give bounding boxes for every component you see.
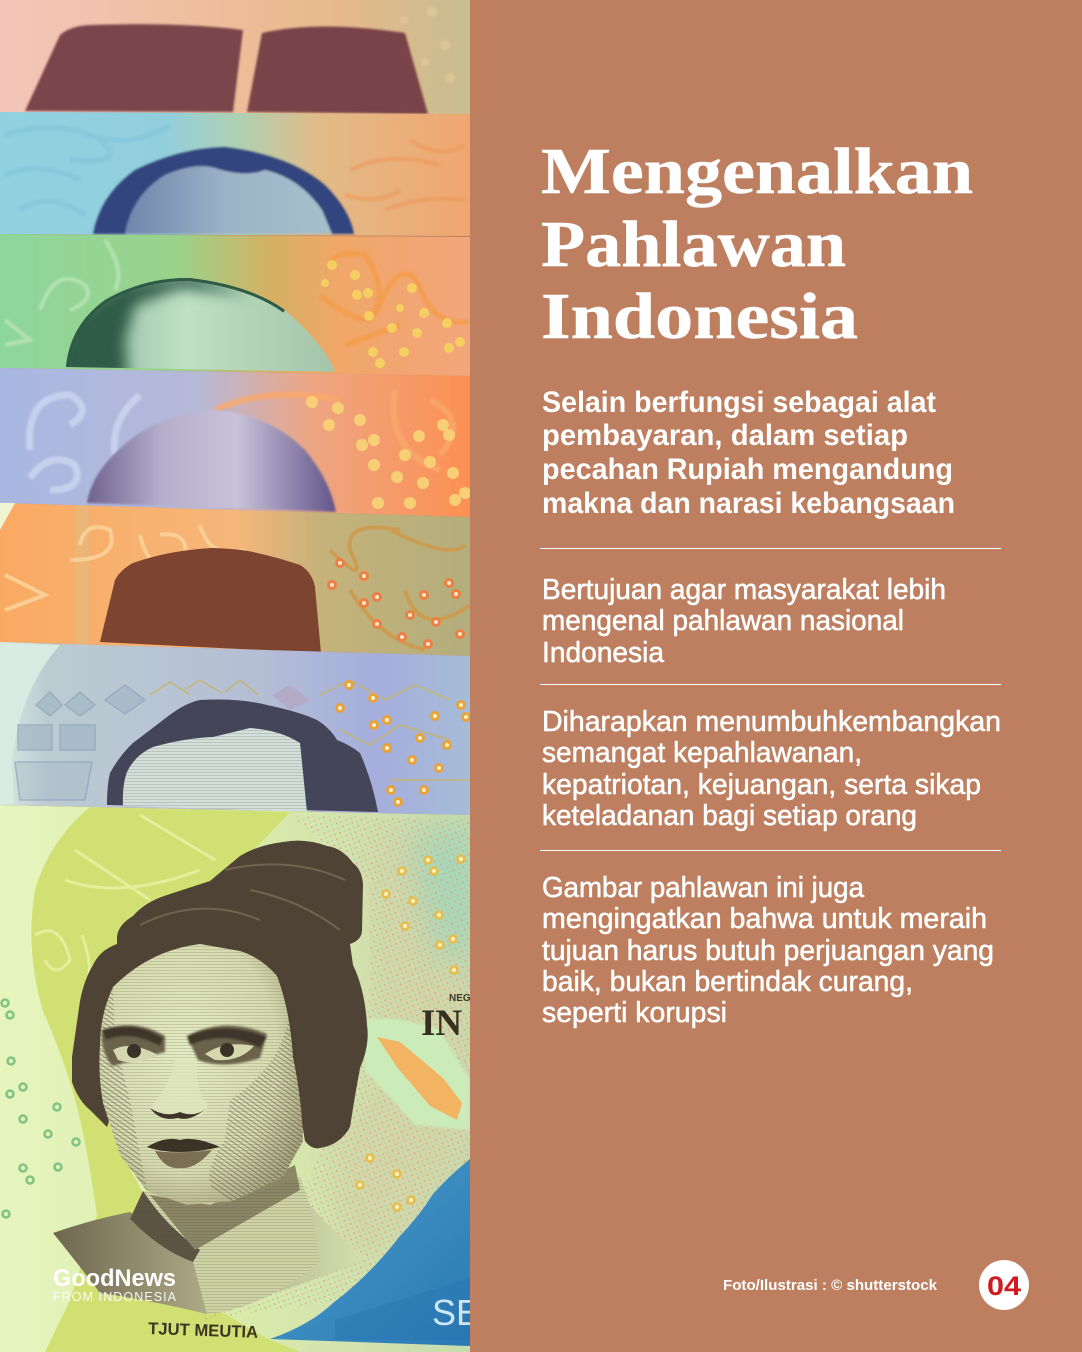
subheading: makna dan narasi kebangsaan — [542, 487, 955, 520]
text block: point 1 — [542, 574, 946, 669]
text block: point 1: Bertujuan agar masyarakat lebih — [542, 574, 946, 606]
text block: point 2: Diharapkan menumbuhkembangkan — [542, 706, 1001, 738]
head: purple portrait — [87, 410, 336, 512]
subheading: Selain berfungsi sebagai alat — [542, 386, 936, 419]
lips — [147, 1139, 220, 1168]
title: Indonesia — [541, 280, 858, 353]
text block: point 3: mengingatkan bahwa untuk meraih — [542, 903, 987, 935]
yellow-green guilloche band — [31, 807, 300, 1352]
portrait: Tjut Meutia — [53, 841, 368, 1314]
page number badge: 04 — [987, 1271, 1021, 1301]
eyes — [113, 1043, 254, 1062]
title: Mengenalkan — [541, 135, 973, 208]
text block: point 3 — [542, 872, 994, 1029]
coat — [53, 1205, 367, 1314]
logo: GoodNews from Indonesia: GoodNews — [53, 1265, 176, 1292]
text block: point 2: kepatriotan, kejuangan, serta sikap — [542, 769, 981, 801]
hair back — [72, 841, 368, 1148]
banknote 7: Tjut Meutia note — [0, 805, 480, 1352]
text block: point 3: tujuan harus butuh perjuangan yang — [542, 935, 994, 967]
title: Pahlawan — [541, 208, 846, 281]
subheading: pecahan Rupiah mengandung — [542, 453, 953, 486]
head: blue portrait — [93, 147, 354, 234]
photo credit: Foto/Ilustrasi : © shutterstock — [723, 1277, 938, 1294]
yellow dots — [356, 856, 464, 1210]
logo: GoodNews from Indonesia: FROM INDONESIA — [53, 1290, 177, 1304]
portrait: dark hair and forehead — [107, 700, 378, 812]
caption: TJUT MEUTIA: TJUT MEUTIA — [148, 1319, 258, 1342]
head: green portrait — [66, 278, 335, 372]
panel: banknote photo — [0, 0, 470, 1352]
peci left half — [25, 24, 243, 112]
text block: point 3: seperti korupsi — [542, 997, 727, 1029]
brows and eye sockets — [102, 1025, 267, 1066]
neck and collar — [130, 1177, 320, 1314]
text block: point 1: Indonesia — [542, 637, 665, 669]
text block: point 3: baik, bukan bertindak curang, — [542, 966, 913, 998]
text block: point 2: semangat kepahlawanan, — [542, 737, 862, 769]
text block: point 2: keteladanan bagi setiap orang — [542, 800, 917, 832]
blue corner — [270, 1159, 480, 1346]
nose — [150, 1060, 207, 1119]
peci: brown hat — [100, 548, 321, 653]
page number badge — [979, 1260, 1029, 1310]
subheading: pembayaran, dalam setiap — [542, 419, 908, 452]
text fragment: INDONESIA: IN — [421, 1003, 462, 1044]
banknote 2: blue with head — [0, 112, 470, 236]
banknote 6: grey-blue with portrait — [0, 642, 470, 815]
banknote 3: green with head — [0, 234, 470, 380]
text block: point 1: mengenal pahlawan nasional — [542, 605, 904, 637]
subheading — [542, 386, 955, 520]
panel: brown text column — [470, 0, 1082, 1352]
logo: GoodNews from Indonesia — [53, 1265, 177, 1304]
text block: point 2 — [542, 706, 1001, 832]
green dots — [2, 1000, 80, 1218]
pink-mint security pattern — [200, 815, 480, 1320]
title — [541, 135, 973, 353]
banknote 5: orange with peci — [0, 503, 470, 656]
text fragment: INDONESIA — [422, 994, 470, 1035]
text block: point 3: Gambar pahlawan ini juga — [542, 872, 865, 904]
peci right half — [247, 26, 428, 114]
face — [99, 944, 303, 1205]
map of Sumatra — [362, 1019, 470, 1130]
banknote 4: lilac with head — [0, 368, 471, 517]
banknote 1: pink with peci — [0, 0, 470, 114]
